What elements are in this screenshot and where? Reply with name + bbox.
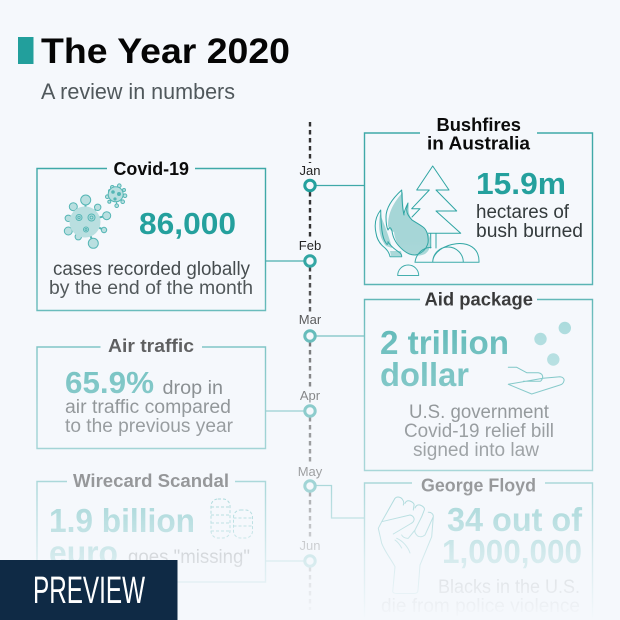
timeline: [265, 122, 365, 610]
icon: hand with coins: [508, 322, 571, 394]
stat: 65.9%: 65.9%: [65, 365, 154, 400]
panel: Aid package: [364, 288, 592, 470]
title marker: [18, 37, 34, 64]
description: [404, 402, 554, 461]
stat: 1.9 billion euro: 1.9 billion: [49, 502, 195, 539]
description: air traffic compared: [65, 397, 231, 418]
icon: viruses: [64, 184, 127, 248]
description: signed into law: [413, 440, 539, 461]
connector: May: [315, 486, 365, 518]
month: Jun: Jun: [300, 538, 320, 553]
stat: 2 trillion dollar: 2 trillion: [380, 324, 509, 361]
heading: Aid package: Aid package: [424, 288, 533, 310]
description: drop in: [162, 378, 223, 399]
preview badge: PREVIEW: [33, 570, 145, 612]
month: Jan: Jan: [300, 163, 320, 178]
heading: Bushfires in Australia: [427, 114, 531, 154]
connector: Jan: [315, 184, 365, 186]
description: Covid-19 relief bill: [404, 421, 554, 442]
heading: Wirecard Scandal: Wirecard Scandal: [73, 470, 229, 491]
stat: 1.9 billion euro: [49, 502, 195, 571]
panel: Air traffic: [37, 335, 266, 448]
fade overlay: [0, 240, 620, 620]
icon: raised fist: [378, 497, 433, 594]
description: [476, 202, 583, 242]
month: Apr: Apr: [300, 388, 321, 403]
description: U.S. government: [409, 402, 550, 423]
connector: Mar: [315, 335, 365, 337]
month: Jan: [300, 163, 320, 191]
stat: 34 out of 1,000,000: 34 out of: [447, 501, 583, 538]
stat: 2 trillion dollar: [380, 324, 509, 393]
description: [65, 378, 234, 437]
heading: Bushfires in Australia: in Australia: [427, 132, 531, 154]
stat: 86,000: 86,000: [139, 206, 236, 241]
stat: 15.9m: 15.9m: [476, 166, 566, 201]
heading: Covid-19: Covid-19: [114, 158, 189, 179]
description: bush burned: [476, 221, 583, 242]
connector: Jun: [265, 560, 305, 562]
icon: coins: [211, 499, 252, 538]
month: Mar: Mar: [299, 312, 322, 327]
panel: Covid-19: [37, 158, 266, 310]
month: May: May: [298, 464, 323, 479]
description: die from police violence: [381, 596, 580, 617]
description: hectares of: [476, 202, 570, 223]
stat: 34 out of 1,000,000: [442, 501, 583, 570]
title: The Year 2020: [41, 32, 290, 71]
connector: Apr: [265, 410, 305, 412]
stat: 34 out of 1,000,000: 1,000,000: [442, 533, 582, 570]
icon: fire and tree: [375, 166, 479, 276]
panel: Wirecard Scandal: [37, 470, 266, 582]
month: May: [298, 464, 323, 491]
subtitle: A review in numbers: [41, 79, 235, 104]
stat: 2 trillion dollar: dollar: [380, 356, 469, 393]
connector: Feb: [265, 260, 305, 262]
heading: Bushfires in Australia: Bushfires: [436, 114, 521, 135]
preview badge: [0, 560, 178, 620]
description: [49, 259, 253, 299]
description: Blacks in the U.S.: [438, 577, 580, 598]
description: to the previous year: [65, 416, 234, 437]
month: Apr: [300, 388, 321, 416]
description: [381, 577, 580, 617]
stat: 1.9 billion euro: euro: [49, 534, 118, 571]
description: cases recorded globally: [53, 259, 250, 280]
month: Feb: [299, 238, 321, 266]
month: Feb: Feb: [299, 238, 321, 253]
month: Jun: [300, 538, 320, 566]
description: by the end of the month: [49, 278, 253, 299]
description: goes "missing": [128, 547, 250, 568]
panel: Bushfires in Australia: [364, 114, 592, 284]
panel: George Floyd: [364, 474, 592, 620]
heading: Air traffic: Air traffic: [108, 335, 194, 356]
heading: George Floyd: George Floyd: [421, 474, 536, 496]
month: Mar: [299, 312, 322, 341]
